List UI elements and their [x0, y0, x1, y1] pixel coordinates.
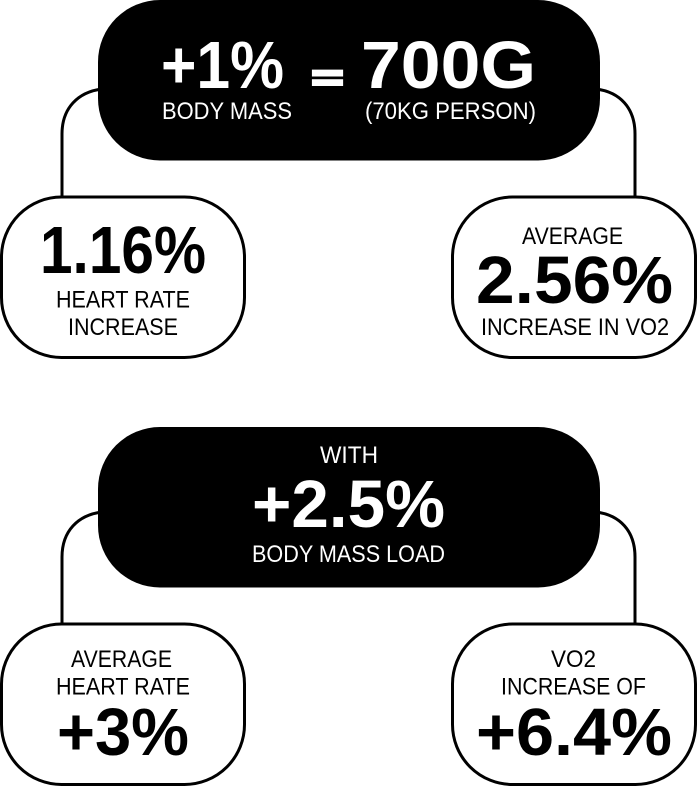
text: 700G: 700G — [361, 28, 536, 103]
text: +6.4%: +6.4% — [476, 695, 672, 770]
text: increase in vo2: INCREASE IN VO2 — [481, 314, 669, 341]
panel: VO2 increase — [452, 197, 696, 358]
text: heart rate: HEART RATE — [56, 674, 190, 700]
text: increase of: INCREASE OF — [501, 674, 646, 700]
text: heart rate label: HEART RATE — [56, 286, 190, 314]
text: +2.5%: +2.5% — [252, 467, 445, 542]
text: average: AVERAGE — [522, 223, 623, 250]
text: with: WITH — [320, 442, 378, 469]
connector lines — [62, 89, 635, 625]
panel: second header pill — [98, 427, 600, 588]
text: average: AVERAGE — [71, 646, 172, 673]
text: body mass: BODY MASS — [162, 98, 292, 125]
text: 2.56%: 2.56% — [476, 243, 673, 318]
text: +3%: +3% — [57, 695, 189, 770]
text: +1%: +1% — [161, 28, 284, 103]
panel: VO2 increase of — [452, 624, 696, 784]
text: vo2: VO2 — [551, 646, 596, 673]
panel: average heart rate — [2, 624, 244, 784]
text: 1.16%: 1.16% — [40, 213, 206, 288]
panel: heart rate increase — [2, 197, 244, 358]
text: increase label: INCREASE — [68, 314, 178, 341]
text: 70kg person: (70KG PERSON) — [365, 98, 536, 125]
text: equals: = — [312, 58, 343, 97]
panel: top header pill — [98, 0, 600, 160]
text: body mass load: BODY MASS LOAD — [252, 541, 445, 568]
